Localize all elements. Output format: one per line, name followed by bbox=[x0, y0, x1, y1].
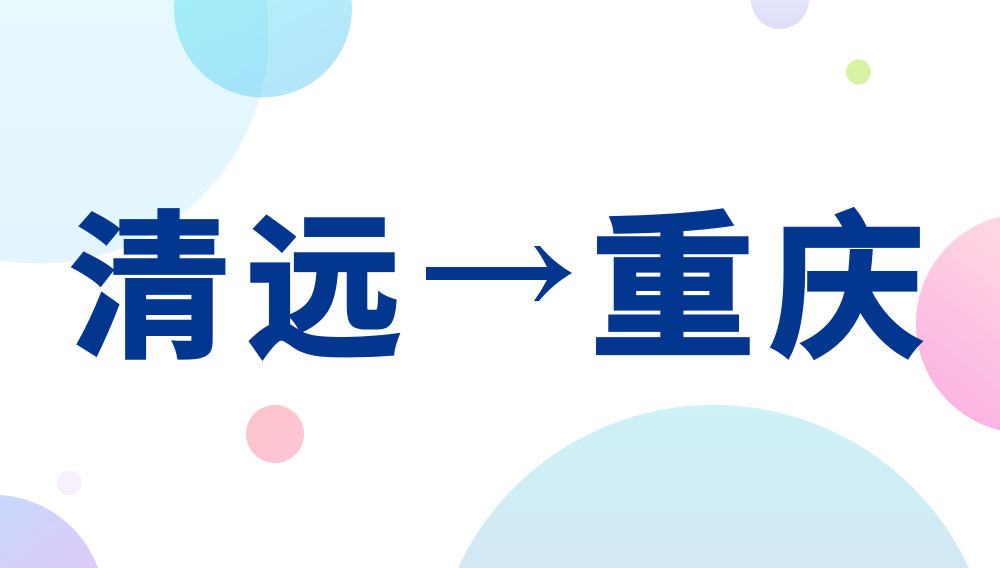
circle: top right lavender bbox=[751, 0, 809, 29]
title: destination: 重 bbox=[590, 161, 755, 390]
title bbox=[69, 161, 924, 390]
circle: bottom left periwinkle bbox=[0, 495, 98, 568]
title: destination bbox=[590, 161, 924, 390]
circle: top centre blue bbox=[174, 0, 352, 97]
title: destination: 庆 bbox=[769, 161, 924, 390]
title: origin: 远 bbox=[246, 161, 402, 390]
circle: right pink bbox=[916, 217, 1000, 430]
circle: small green bbox=[846, 60, 871, 84]
circle: bottom large aqua bbox=[458, 405, 969, 568]
title: origin: 清 bbox=[69, 161, 230, 390]
circle: small pink bbox=[246, 405, 304, 463]
title: origin bbox=[69, 161, 402, 390]
arrow glyph bbox=[426, 246, 572, 301]
circle: top left large pale blue bbox=[0, 0, 269, 264]
circle: small pale lilac bbox=[56, 470, 82, 496]
